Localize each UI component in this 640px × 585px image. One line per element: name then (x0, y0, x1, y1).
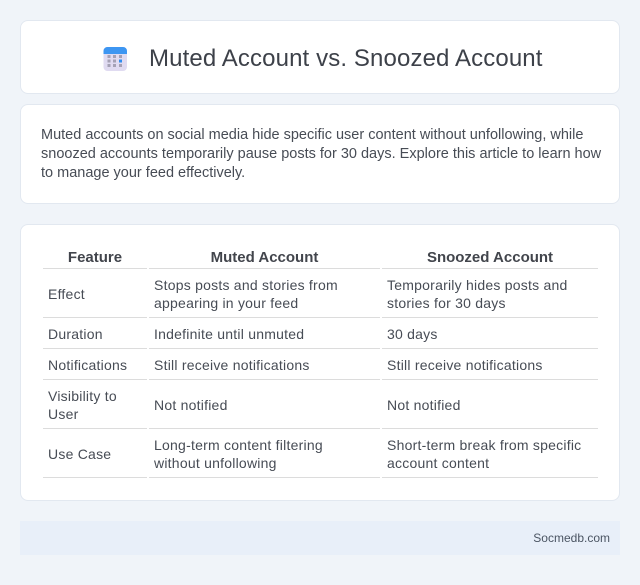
row: duration: Indefinite until unmuted (154, 326, 304, 342)
row: effect: stories for 30 days (387, 295, 506, 311)
panel: title card (20, 20, 620, 94)
row: notifications: Still receive notifications (387, 357, 543, 373)
row: effect: appearing in your feed (154, 295, 298, 311)
row: use case: Short-term break from specific (387, 437, 581, 453)
intro text: snoozed accounts temporarily pause posts for 30 days. Explore this article to learn how (41, 146, 601, 162)
row: duration: 30 days (387, 326, 438, 342)
intro text: to manage your feed effectively. (41, 165, 245, 181)
row: effect: Temporarily hides posts and (387, 277, 568, 293)
row: visibility: Not notified (154, 397, 228, 413)
row: duration: Duration (48, 326, 103, 342)
row: notifications (48, 357, 543, 373)
row: effect: Stops posts and stories from (154, 277, 338, 293)
row: effect (48, 277, 568, 311)
row: use case: Long-term content filtering (154, 437, 323, 453)
row: visibility: User (48, 406, 78, 422)
row: use case: without unfollowing (154, 455, 277, 471)
row: effect: Effect (48, 286, 85, 302)
footer text: Socmedb.com (533, 531, 610, 545)
panel: intro (20, 104, 620, 204)
footer bar (20, 521, 620, 555)
icon: calendar (104, 47, 127, 71)
table header: Snoozed Account (427, 249, 553, 266)
row: duration (48, 326, 438, 342)
table header (68, 249, 553, 266)
row: notifications: Still receive notifications (154, 357, 310, 373)
row: use case (48, 437, 581, 471)
table header: Feature (68, 249, 122, 266)
row: use case: account content (387, 455, 489, 471)
intro text: Muted accounts on social media hide specific user content without unfollowing, while (41, 127, 583, 143)
row: visibility (48, 388, 461, 422)
row: use case: Use Case (48, 446, 111, 462)
table header: Muted Account (211, 249, 318, 266)
row: notifications: Notifications (48, 357, 127, 373)
intro text (41, 127, 602, 181)
row: visibility: Not notified (387, 397, 461, 413)
title: Muted Account vs. Snoozed Account (149, 45, 543, 72)
row: visibility: Visibility to (48, 388, 117, 404)
panel: comparison table (20, 224, 620, 501)
